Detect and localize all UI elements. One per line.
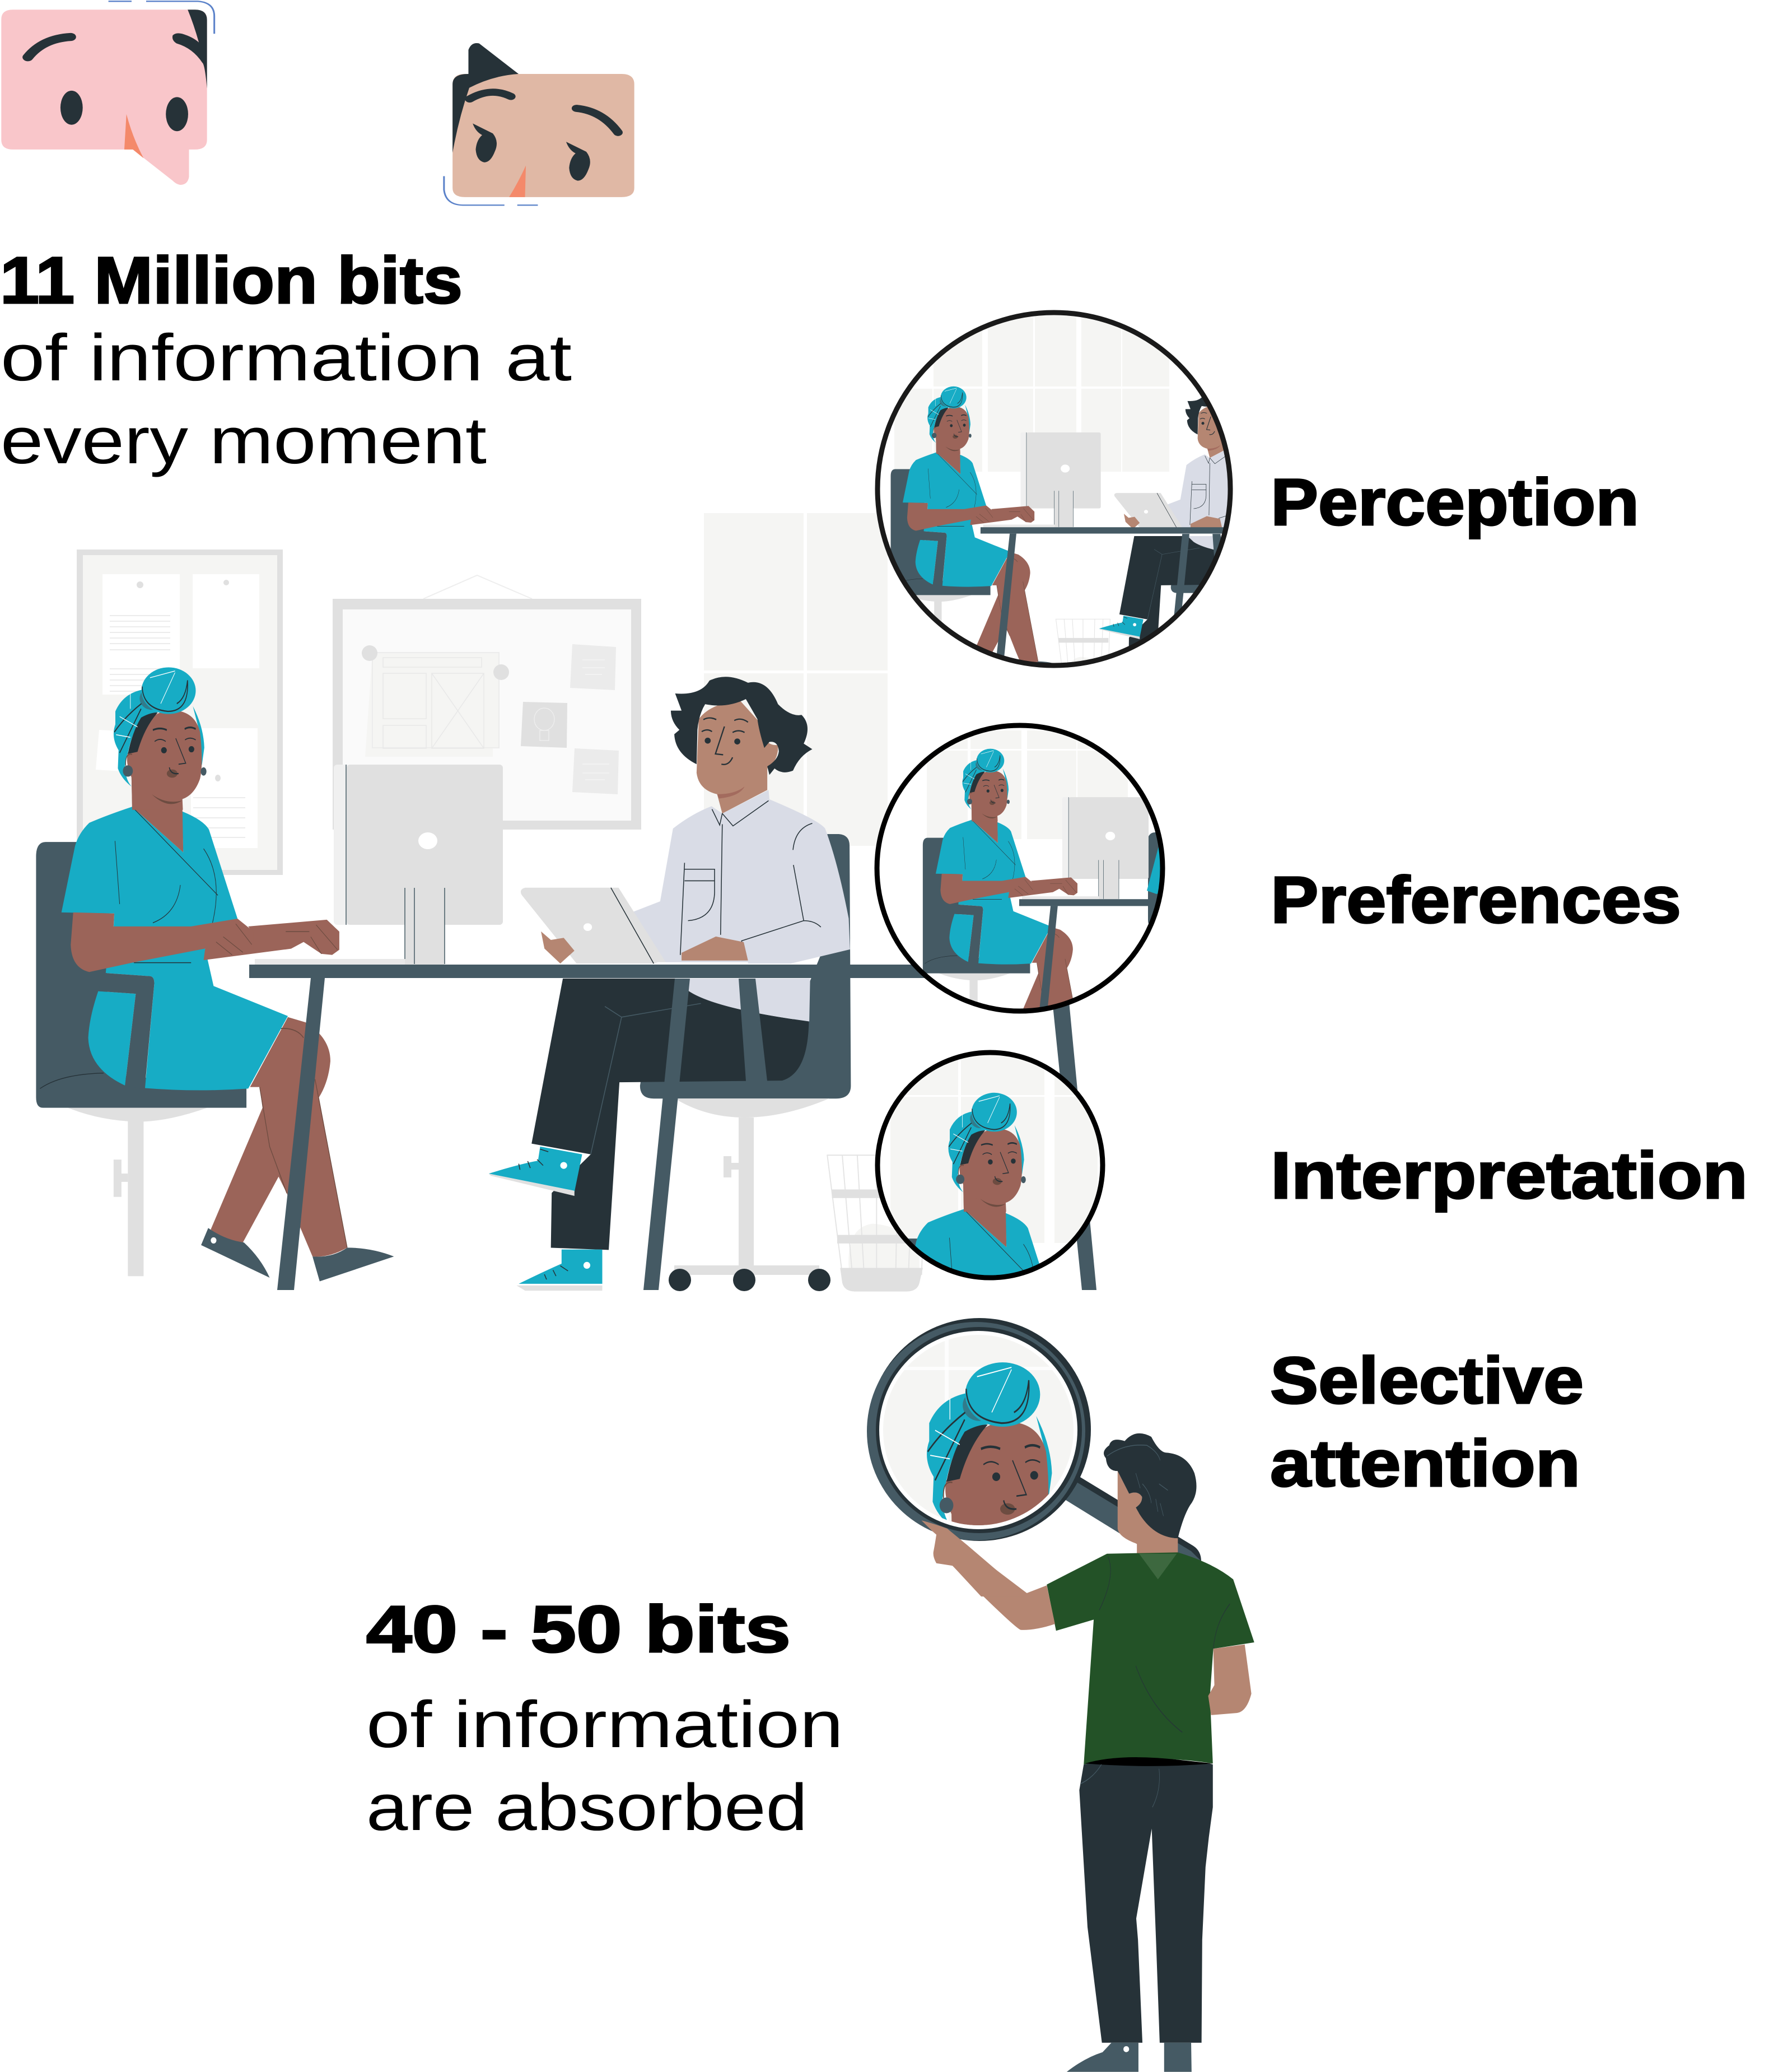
shoes xyxy=(1067,2043,1138,2072)
man holding magnifying glass xyxy=(952,1433,1254,2072)
label: Preferences: Preferences xyxy=(1271,863,1681,937)
text: of information at every moment xyxy=(1,321,572,478)
chair back and seat xyxy=(640,834,851,1098)
waste bin xyxy=(827,1155,926,1292)
zoom circle: Perception xyxy=(875,310,1233,668)
label: Selective attention: attention xyxy=(1270,1427,1580,1501)
laptop xyxy=(521,888,666,963)
trousers xyxy=(531,979,809,1250)
sneakers xyxy=(489,1147,582,1192)
chair wheels xyxy=(669,1269,830,1291)
pinboard with papers xyxy=(77,550,283,875)
hand pointing at lens xyxy=(921,1520,1027,1596)
heading: 11 Million bits: 11 Million bits xyxy=(0,244,463,318)
chair base: man xyxy=(674,1098,829,1275)
magnifying glass with woman's head xyxy=(867,1318,1091,1559)
window panes xyxy=(704,513,888,846)
label: Selective attention xyxy=(1270,1344,1584,1501)
woman on chair xyxy=(36,667,394,1282)
text: of information are absorbed: are absorbed xyxy=(366,1771,808,1845)
zoom circle: Interpretation xyxy=(875,1050,1105,1281)
text: of information are absorbed: of information xyxy=(366,1688,843,1762)
heading: 40 - 50 bits: 40 - 50 bits xyxy=(366,1593,791,1666)
neck and head xyxy=(697,700,778,813)
green t-shirt xyxy=(1047,1552,1254,1764)
trousers xyxy=(1079,1759,1213,2043)
chair and stem xyxy=(36,842,246,1276)
hair xyxy=(671,677,813,775)
label: Perception: Perception xyxy=(1271,465,1639,539)
label: Selective attention: Selective xyxy=(1270,1344,1584,1418)
hands xyxy=(541,932,575,963)
hair and head xyxy=(1118,1471,1178,1554)
text: of information are absorbed xyxy=(366,1688,843,1845)
desk top and legs xyxy=(249,965,1096,1290)
man with laptop xyxy=(489,677,851,1291)
shirt xyxy=(632,790,850,963)
label: Interpretation: Interpretation xyxy=(1271,1139,1748,1213)
text: of information at every moment: of information at xyxy=(1,321,572,395)
zoom circle: Preferences xyxy=(875,723,1165,1014)
legs and shoes xyxy=(201,1017,394,1282)
arms xyxy=(952,1533,1055,1630)
wireframe board xyxy=(333,575,641,830)
text: of information at every moment: every moment xyxy=(1,404,487,478)
monitor and keyboard xyxy=(255,765,503,965)
face xyxy=(704,738,740,744)
magnifying glass handle xyxy=(1064,1477,1201,1580)
office background: boards and window xyxy=(77,513,888,875)
face: beige listener xyxy=(444,43,634,205)
face: pink listener xyxy=(1,1,214,185)
dress, arms and neck xyxy=(62,774,339,1090)
head with turban xyxy=(114,667,207,810)
